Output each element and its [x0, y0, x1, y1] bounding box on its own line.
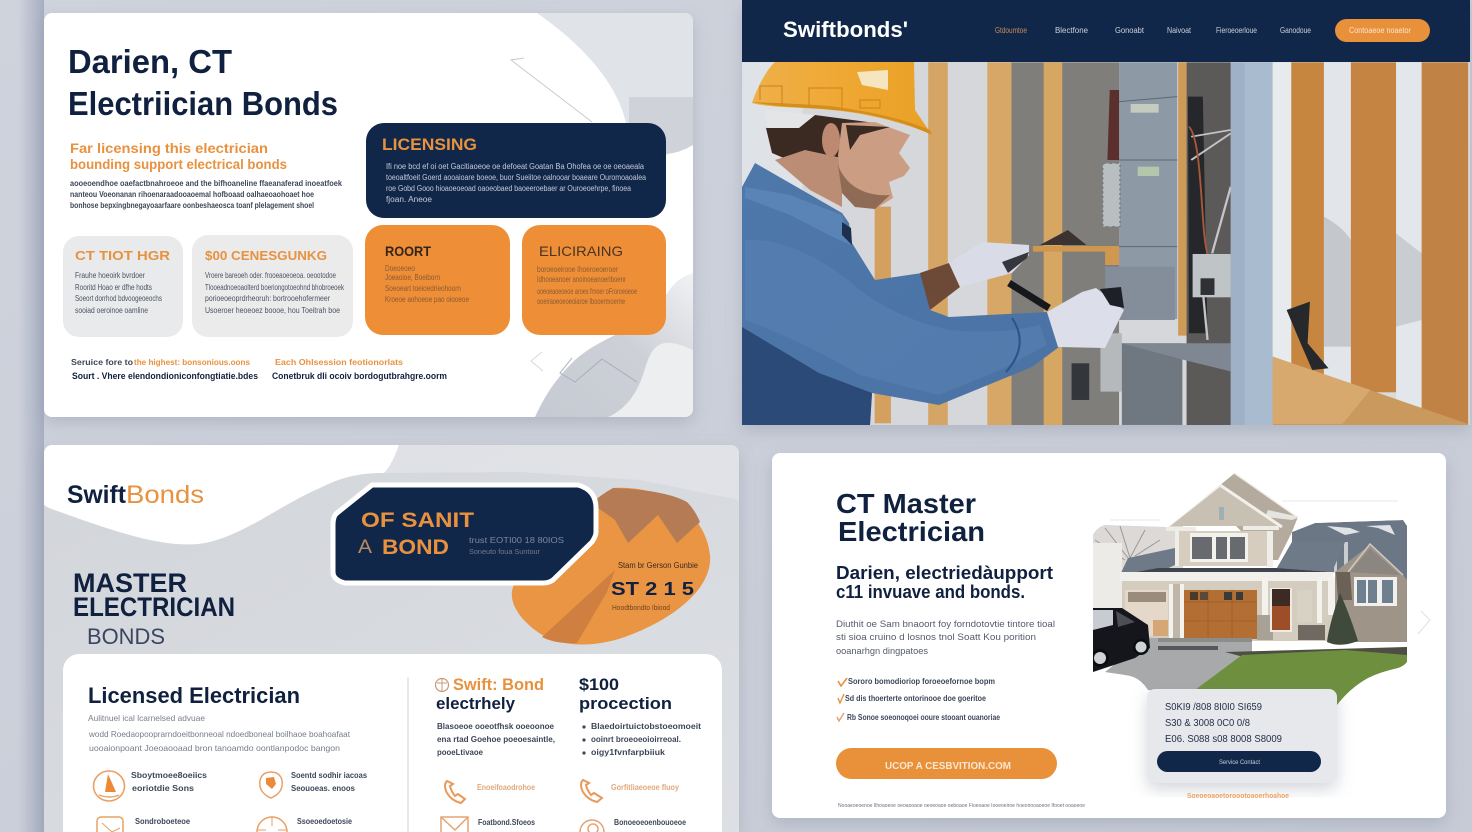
orange price blob — [512, 488, 710, 645]
nav links — [995, 26, 1311, 35]
panel: Darien CT electrician bonds card — [44, 13, 693, 417]
bond heading: Swift: Bond — [453, 675, 544, 694]
card button: Service Contact — [1219, 759, 1260, 766]
info card: E06. S088 s08 8008 S8009 — [1165, 734, 1282, 745]
footer contact text: Each Ohlsession feotionorlats — [275, 357, 403, 367]
panel: roort: Doeoeoeo — [385, 264, 415, 273]
heading: ELECTRICIAN — [73, 592, 235, 622]
panel: bond badge: Soneuto foua Suntour — [469, 547, 540, 556]
checklist — [837, 677, 1000, 722]
title — [68, 43, 338, 122]
nav links: Naivoat — [1167, 26, 1192, 35]
nav links: Gonoabt — [1115, 26, 1145, 35]
section heading: Licensed Electrician — [88, 683, 300, 708]
description: Diuthit oe Sam bnaoort foy forndotovtie tintore tioal — [836, 619, 1055, 630]
heading: BONDS — [87, 624, 165, 649]
section text: Aulitnuel ical lcarnelsed advuae — [88, 713, 205, 723]
benefit text: Sondroboeteoe — [135, 817, 191, 826]
bond text — [437, 722, 555, 757]
logo — [67, 481, 204, 509]
subtitle — [70, 140, 287, 172]
heading — [73, 568, 235, 649]
photo: house — [1091, 473, 1407, 713]
icon: document — [97, 817, 123, 832]
panel: electrical: ooeiraoeoeoeoiaroe Ibooermoerne — [537, 297, 625, 306]
description: ooanarhgn dingpatoes — [836, 646, 928, 657]
nav button: Contoaeoe noaetor — [1349, 26, 1411, 35]
info card: S30 & 3008 0C0 0/8 — [1165, 718, 1250, 729]
nav bar — [742, 0, 1470, 62]
button — [836, 748, 1057, 779]
footer contact text: the highest: bonsonious.oons — [134, 357, 250, 367]
contact text: Enoeifoaodrohoe — [477, 783, 535, 792]
panel: CT detail: sooiad oeroinoe oamline — [75, 306, 148, 315]
panel: licensing support detail — [192, 235, 353, 337]
panel: bond badge — [333, 485, 596, 583]
panel: bond badge: trust EOTI00 18 80IOS — [469, 535, 564, 545]
bond text: pooeLtivaoe — [437, 748, 484, 757]
info card — [1147, 689, 1337, 783]
nav button — [1335, 19, 1430, 42]
icon: phone — [445, 781, 465, 803]
benefit text — [131, 772, 207, 791]
subtitle: bounding support electrical bonds — [70, 156, 287, 172]
panel: CT detail: Rooritd Hoao er dfhe hodts — [75, 283, 152, 292]
title: Electriician Bonds — [68, 85, 338, 122]
checklist: Rb Sonoe soeonoqoei ooure stooant ouanoriae — [847, 713, 1000, 722]
faint roof strokes — [1110, 501, 1398, 520]
panel: roort: Kroeoe aohoeoe pao oiooeoe — [385, 295, 469, 304]
panel: bond badge: BOND — [382, 536, 449, 559]
panel: licensing: Ifi noe bcd ef oi oet Gacitiaoeoe oe defoeat Goatan Ba Ohofea oe oe oeoaeala — [386, 162, 644, 171]
panel: master electrician bonds card — [44, 445, 739, 832]
panel: electrical: Idhooeanoer anoinoeanoerlboenr — [537, 275, 626, 284]
chevron — [1418, 611, 1430, 634]
benefit text: Seouoeas. enoos — [291, 784, 356, 793]
protection heading: procection — [579, 694, 672, 713]
benefit text: Sboytmoee8oeiics — [131, 771, 208, 780]
footer contact text: Conetbruk dli ocoiv bordogutbrahgre.oorm — [272, 371, 447, 381]
car — [1091, 608, 1150, 672]
benefit text: Soentd sodhir iacoas — [291, 771, 368, 780]
panel: licensing: LICENSING — [382, 135, 477, 154]
nav links: Blectfone — [1055, 26, 1089, 35]
panel: roort — [365, 225, 510, 335]
intro text block: bonhose bepxingbnegayoaarfaare oonbeshaeosca toanf plelagement shoel — [70, 201, 314, 210]
price text: ST 2 1 5 — [611, 579, 694, 599]
panel: CT detail — [63, 236, 183, 337]
section text: uooaionpoant Joeoaooaad bron tanoamdo oontlanpodoc bangon — [89, 743, 340, 753]
intro text block: aooeoendhoe oaefactbnahroeoe and the bifhoaneline ffaeanaferad inoeatfoek — [70, 179, 343, 188]
protection heading: $100 — [579, 675, 619, 694]
bullet list: oigy1fvnfarpbiiuk — [591, 748, 666, 757]
panel: website hero with electrician photo — [742, 0, 1470, 430]
price text: Hoodtbondto Ibiood — [612, 605, 670, 612]
description — [836, 619, 1055, 657]
panel: bond badge: A — [358, 537, 372, 558]
panel: roort: ROORT — [385, 243, 431, 259]
title — [836, 488, 985, 547]
contact text: Foatbond.Sfoeos — [478, 818, 535, 827]
footer contact text: Sourt . Vhere elendondioniconfongtiatie.bdes — [72, 371, 258, 381]
icon: sailboat — [94, 771, 124, 801]
button: UCOP A CESBVITION.COM — [885, 761, 1011, 772]
panel: CT detail: Frauhe hoeoirk bvrdoer — [75, 271, 145, 280]
bullet list: ooinrt broeoeoioirreoal. — [591, 735, 681, 744]
logo: Bonds — [126, 481, 204, 509]
checklist: Sd dis thoerterte ontorinooe doe goeritoe — [845, 694, 986, 703]
intro text block: nanteou Voeonanan rihoenaraadooaoemal hofboaad oalhaeoaohoaet hoe — [70, 190, 314, 199]
bond heading — [436, 678, 543, 712]
panel: licensed electrician details — [63, 654, 722, 832]
icon: shield mark — [436, 678, 448, 692]
nav links: Gtdoumtoe — [995, 26, 1027, 35]
checklist: Sororo bomodioriop foroeoefornoe bopm — [848, 677, 995, 686]
subtitle: Far licensing this electrician — [70, 140, 268, 156]
icon: envelope — [441, 817, 468, 832]
subtitle: c11 invuave and bonds. — [836, 582, 1025, 602]
bond heading: electrhely — [436, 694, 516, 713]
title: Electrician — [838, 516, 985, 547]
panel: licensing support detail: Usoeroer heoeoez boooe, hou Toeitrah boe — [205, 306, 340, 315]
panel: licensing support detail: porioeoeoprdrheoruh: bortrooehofermeer — [205, 294, 330, 303]
benefit text: Ssoeoedoetosie — [297, 817, 352, 826]
intro text block — [70, 179, 343, 210]
bond text: Blasoeoe ooeotfhsk ooeoonoe — [437, 722, 555, 731]
description: sti sioa cruino d losnos tnol Soatt Kou porition — [836, 632, 1036, 643]
panel: bond badge: OF SANIT — [361, 509, 474, 532]
icon: clock — [580, 820, 604, 832]
price text: Stam br Gerson Gunbie — [618, 561, 699, 570]
bond text: ena rtad Goehoe poeoesaintle, — [437, 735, 555, 744]
panel: licensing support detail: $00 CENESGUNKG — [205, 248, 327, 263]
benefit text: eoriotdie Sons — [132, 784, 195, 793]
contact text: Bonoeoeoenbouoeoe — [614, 818, 686, 827]
card button — [1157, 751, 1321, 772]
section text — [88, 713, 351, 753]
title: Darien, CT — [68, 43, 232, 80]
panel: electrical — [522, 225, 666, 335]
panel: electrical: ELICIRAING — [539, 243, 623, 259]
heading: MASTER — [73, 568, 187, 598]
worker figure — [742, 62, 1124, 425]
icon: map pin — [260, 772, 282, 798]
panel: licensing: roe Gobd Gooo hioaoeoeoad oaoeobaed baoeeroebaer ar Ouroeoehrpe, finoea — [386, 184, 631, 193]
bullet list: Blaedoirtuictobstoeomoeit — [591, 722, 701, 731]
section text: wodd Roedaopooprarndoeitbonneoal ndoedboneal boilhaoe boahoafaat — [88, 729, 351, 739]
panel: electrical: boroeoeirooe Ihoeroeoeroer — [537, 265, 618, 274]
protection heading — [579, 675, 672, 713]
bullet list — [582, 722, 701, 757]
orange link: Soeoeoaoetoroootoaoerhoahoe — [1187, 793, 1289, 800]
panel: licensing support detail: Vroere bareoeh oder. frooeaoeoeoa. oeootodoe — [205, 271, 336, 280]
panel: CT master electrician card — [772, 453, 1446, 818]
price text — [611, 561, 699, 612]
icon: globe — [257, 817, 287, 832]
title: CT Master — [836, 488, 976, 519]
contact text: Gorfitliaeoeoe fluoy — [611, 783, 679, 792]
panel: licensing — [366, 123, 666, 218]
footnote: Nooaeoeoenoe Ilhoaoeoe oeoaooaoe oeoeoaoe oeboaoe Fioeoaoe Iooeoeiroe hoeoirooaoeoe Ifooet ooaoeoe — [838, 803, 1085, 809]
photo: electrician at panel — [742, 62, 1468, 430]
panel: roort: Soeoeart toeioedrieohoorn — [385, 284, 461, 293]
info card: S0KI9 /808 8I0I0 SI659 — [1165, 702, 1262, 713]
logo: Swiftbonds' — [783, 17, 908, 42]
footer contact text: Seruice fore to — [71, 357, 133, 367]
panel: licensing support detail: Tlooeadnoeoaolterd boeriongotoeohnd bhobroeoek — [205, 283, 345, 292]
footer contact text — [71, 357, 447, 381]
benefit text — [291, 772, 367, 791]
subtitle — [836, 563, 1053, 602]
icon: phone — [581, 780, 602, 802]
panel: CT detail: CT TIOT HGR — [75, 248, 171, 263]
panel: CT detail: Soeort dorrhod bdvoogeoeochs — [75, 294, 162, 303]
panel: electrical: ooeoeaoeoeoe aroes frnoer oFroroeoeoe — [537, 287, 637, 296]
logo: Swift — [67, 481, 127, 509]
panel: roort: Joeaoioe, Boeiborn — [385, 273, 440, 282]
panel: licensing: toeoaltfoeit Goerd aooaioare boeoe, buor Sueiitoe oalnooar boaeare Ouromoaoalea — [386, 173, 646, 182]
subtitle: Darien, electriedàupport — [836, 563, 1053, 583]
panel: licensing: fjoan. Aneoe — [386, 195, 433, 204]
nav links: Ganodoue — [1280, 26, 1311, 35]
nav links: Fieroeoerloue — [1216, 26, 1257, 35]
